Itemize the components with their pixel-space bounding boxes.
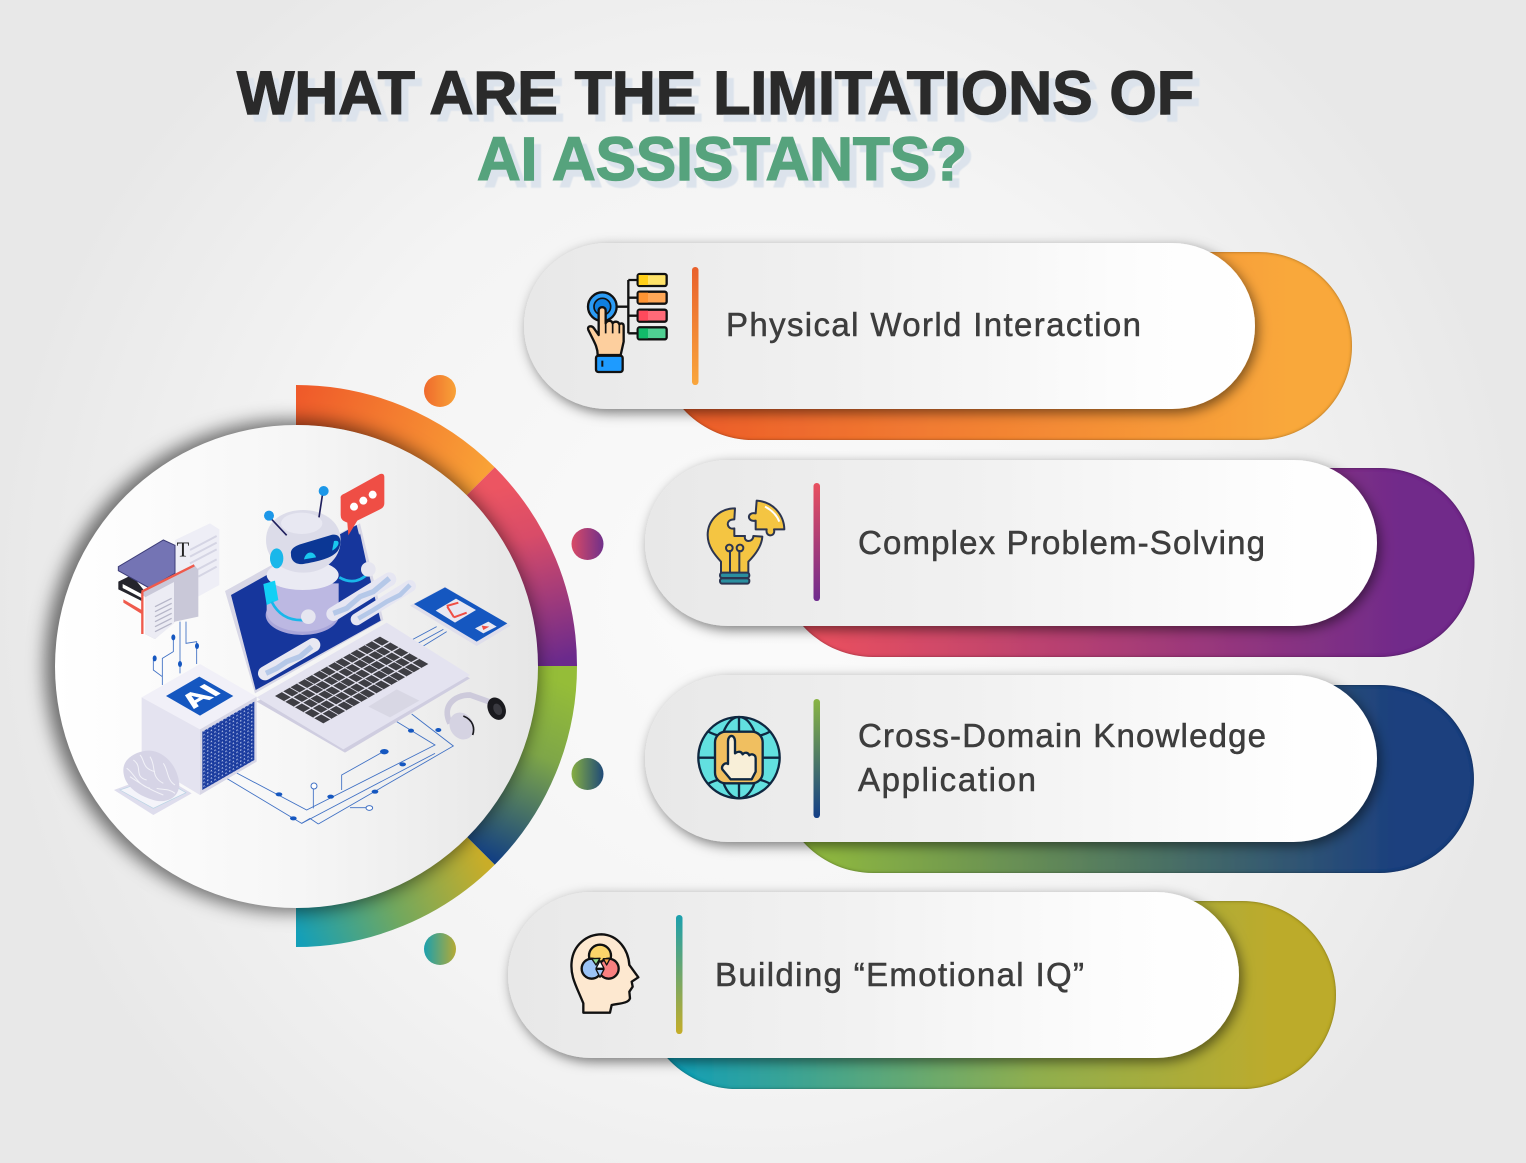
dot: purple <box>572 528 604 560</box>
tablet <box>410 587 511 646</box>
panel: Complex Problem-Solving <box>645 460 1474 657</box>
pill: white <box>508 892 1239 1058</box>
label second line: Application <box>858 761 1036 798</box>
divider <box>692 267 698 385</box>
panel: Physical World Interaction <box>524 243 1352 440</box>
brain <box>114 751 192 815</box>
title: WHAT ARE THE LIMITATIONS OF <box>237 59 1194 127</box>
AI cube: AI <box>173 680 227 712</box>
back shape: purple <box>778 468 1474 657</box>
label: Cross-Domain Knowledge <box>858 717 1266 754</box>
icon: globe with pointing hand <box>698 717 780 798</box>
title: AI ASSISTANTS? <box>477 125 967 193</box>
circuit lines <box>153 622 453 824</box>
icon: head with venn diagram <box>571 934 638 1013</box>
icon: hand tapping tree <box>588 274 667 372</box>
dot: orange <box>424 375 456 407</box>
divider <box>814 483 820 601</box>
back shape: orange <box>659 252 1352 440</box>
document: T <box>177 540 190 562</box>
pill: white <box>645 460 1377 626</box>
AI cube <box>142 664 257 795</box>
back shape: olive <box>643 901 1336 1089</box>
circuit nodes <box>153 634 441 820</box>
circular ring <box>296 405 557 927</box>
headphones <box>445 694 509 744</box>
document <box>175 523 219 597</box>
dot: teal <box>424 933 456 965</box>
icon: puzzle light bulb <box>708 501 784 584</box>
robot <box>263 486 410 635</box>
panel: Building Emotional IQ <box>508 892 1336 1089</box>
label: Complex Problem-Solving <box>858 524 1265 561</box>
disc shadow <box>45 420 537 912</box>
icon: speech bubble <box>341 474 384 535</box>
panel: Cross-Domain Knowledge Application <box>645 675 1474 873</box>
back shape: navy <box>779 685 1474 873</box>
white disc <box>55 425 538 908</box>
title <box>237 59 1194 193</box>
AI illustration <box>114 474 511 824</box>
pill: white <box>524 243 1255 409</box>
dot: green <box>572 758 604 790</box>
label: Building “Emotional IQ” <box>715 956 1084 993</box>
label: Physical World Interaction <box>726 306 1141 343</box>
books <box>118 540 198 639</box>
divider <box>814 699 820 818</box>
laptop <box>225 523 470 753</box>
divider <box>676 915 682 1034</box>
pill: white <box>645 675 1377 842</box>
